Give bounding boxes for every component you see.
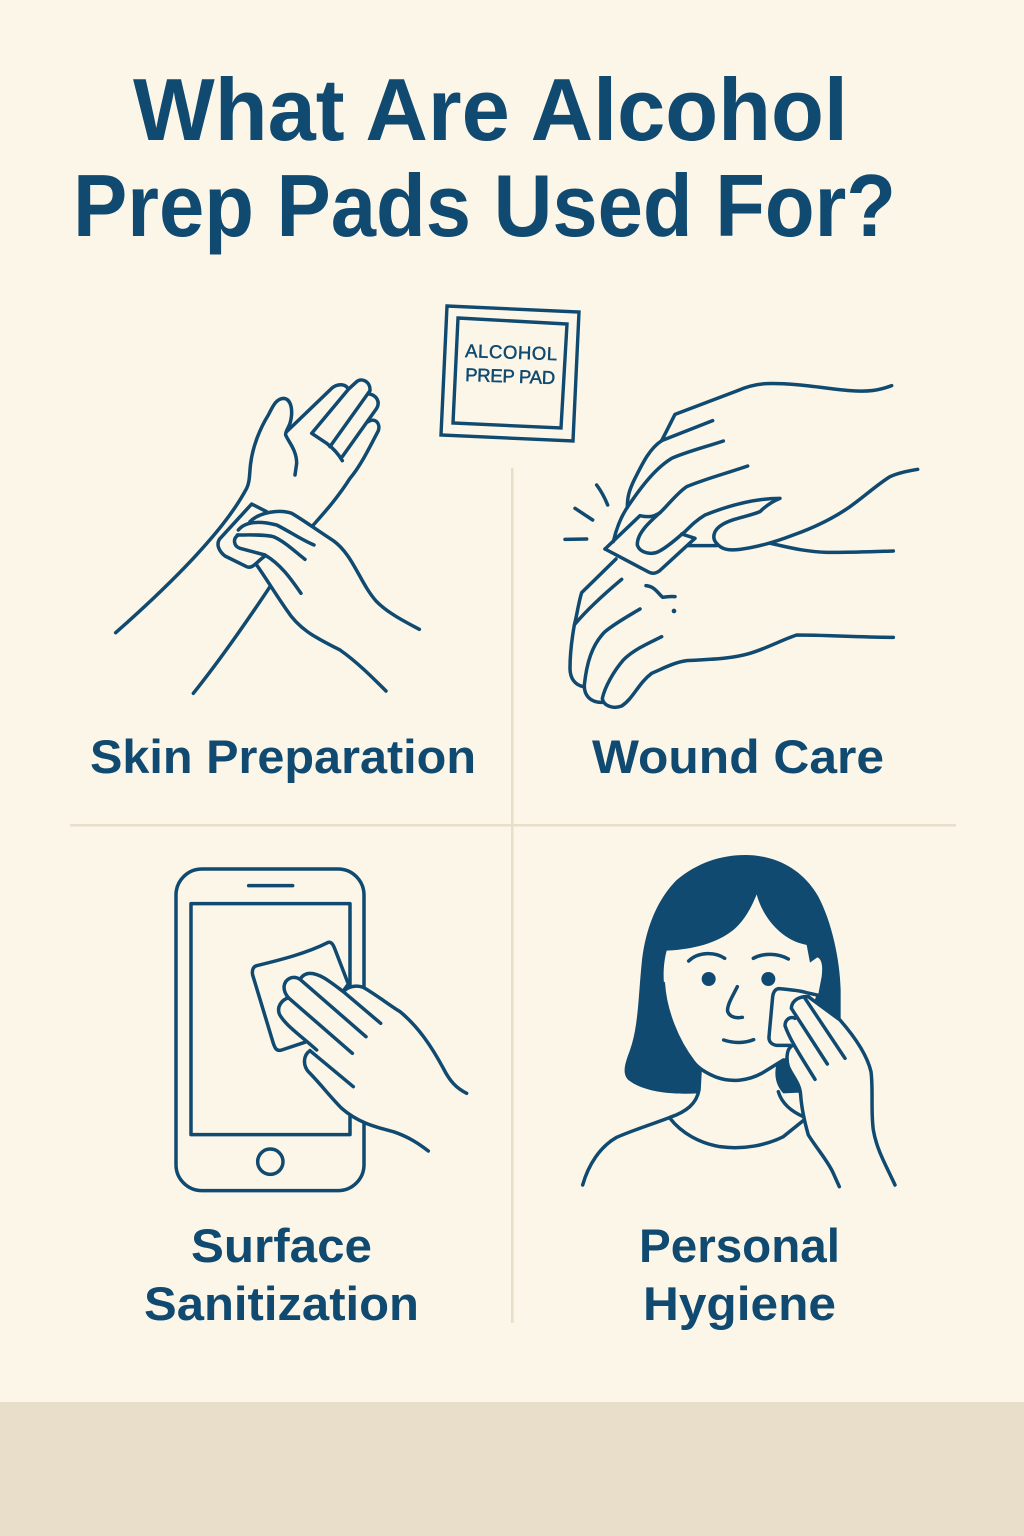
title: What Are Alcohol [133,60,848,159]
title: Prep Pads Used For? [73,156,896,255]
icon: skin preparation hands [116,380,419,693]
face [664,894,822,1080]
icon: alcohol prep pad packet: PREP PAD [465,364,556,388]
label: personal hygiene: Personal [639,1219,840,1272]
label: surface sanitization [144,1219,419,1330]
icon: phone surface sanitization [176,869,467,1191]
icon: alcohol prep pad packet [441,306,579,441]
label: wound care: Wound Care [592,730,884,783]
icon: wound care hands [565,384,918,707]
icon: alcohol prep pad packet: ALCOHOL [465,340,558,364]
hair [625,855,841,1094]
wipe pad [769,989,818,1045]
label: surface sanitization: Sanitization [144,1277,419,1330]
title [73,60,896,255]
label: surface sanitization: Surface [191,1219,372,1272]
label: personal hygiene [639,1219,840,1330]
hand [785,997,895,1187]
label: skin preparation: Skin Preparation [90,730,476,783]
icon: person wiping face [583,855,895,1187]
label: personal hygiene: Hygiene [643,1277,836,1330]
